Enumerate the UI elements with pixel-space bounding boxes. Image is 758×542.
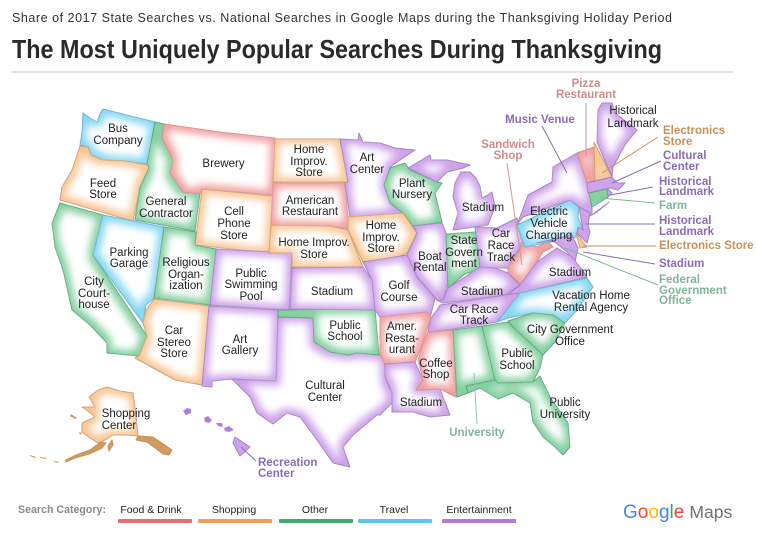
state: Hawaii small islands	[183, 408, 234, 432]
state: Mississippi	[416, 330, 456, 397]
label: Car Race Track TN: Car Race	[450, 304, 498, 316]
label: City Court-house: Court-	[78, 288, 110, 300]
label: Home Improv. Store ND: Store	[295, 167, 323, 179]
legend: Entertainment: Entertainment	[446, 504, 512, 516]
label: Plant Nursery: Plant	[399, 178, 426, 190]
callout: Cultural Center: Center	[663, 161, 700, 173]
callout: University: University	[449, 427, 505, 439]
label: Public Swimming Pool: Pool	[239, 291, 263, 303]
state: Oklahoma	[278, 309, 379, 355]
state: Hawaii	[233, 437, 250, 456]
label: Electric Vehicle Charging: Charging	[526, 230, 572, 242]
legend: Food & Drink	[118, 504, 192, 523]
label: Cultural Center TX: Center	[308, 392, 342, 404]
callout: Sandwich Shop: Sandwich	[481, 139, 535, 151]
state: California	[52, 203, 147, 356]
label: Golf Course: Course	[380, 292, 418, 304]
state: South Carolina	[508, 313, 565, 355]
line: University	[474, 373, 477, 424]
label: Stadium KS: Stadium	[311, 286, 353, 298]
state: Alaska islands	[30, 414, 82, 463]
label: Stadium MI: Stadium	[462, 202, 504, 214]
label: Car Stereo Store: Store	[160, 348, 188, 360]
label: Amer. Resta-urant: Amer.	[387, 321, 417, 333]
callout: Music Venue: Music Venue	[505, 114, 575, 126]
state: Utah	[154, 227, 216, 305]
line: Historical Landmark NJ	[586, 223, 655, 225]
subtitle: Share of 2017 State Searches vs. National Searches in Google Maps during the Thanksgiving Holiday Period	[12, 11, 672, 25]
label: Shopping Center: Center	[102, 420, 136, 432]
label: Plant Nursery: Nursery	[392, 189, 432, 201]
state: Rhode Island	[607, 188, 612, 197]
state: Virginia	[505, 248, 587, 297]
label: City Government Office: Office	[555, 336, 585, 348]
label: Historical Landmark Maine: Historical	[609, 105, 657, 117]
label: Stadium VA: Stadium	[549, 267, 591, 279]
label: American Restaurant: Restaurant	[282, 206, 339, 218]
label: Amer. Resta-urant: Resta-	[385, 333, 419, 345]
colored callout labels	[258, 78, 754, 480]
label: Feed Store: Store	[89, 189, 117, 201]
callout: Historical Landmark RI: Landmark	[659, 186, 715, 198]
state: Ohio	[475, 218, 524, 268]
label: Art Gallery: Gallery	[222, 345, 258, 357]
state: Maine	[597, 103, 637, 177]
callout: Federal Government Office: Office	[659, 295, 692, 307]
title: The Most Uniquely Popular Searches During Thanksgiving	[12, 34, 662, 64]
state: Kentucky	[437, 267, 520, 303]
label: Golf Course: Golf	[388, 280, 410, 292]
label: Home Improv. Store IA: Home	[366, 220, 396, 232]
label: Parking Garage: Parking	[110, 247, 148, 259]
callout: Historical Landmark NJ: Landmark	[659, 226, 715, 238]
state: Arkansas	[380, 312, 431, 364]
label: Cell Phone Store: Store	[220, 230, 248, 242]
label: Art Center: Art	[360, 152, 375, 164]
callout: Historical Landmark NJ: Historical	[659, 215, 711, 227]
label: Home Improv. Store ND: Improv.	[290, 156, 328, 168]
state: Texas	[232, 317, 392, 467]
label: Public Swimming Pool: Swimming	[224, 279, 278, 291]
Google Maps logo: Google Maps	[623, 502, 733, 523]
state: Michigan upper peninsula	[408, 155, 470, 182]
label: Public School OK: Public	[329, 320, 361, 332]
state: New Jersey	[577, 207, 590, 243]
label: Art Center: Center	[350, 164, 384, 176]
line: Stadium Maryland	[583, 252, 655, 264]
label: Car Stereo Store: Stereo	[157, 337, 191, 349]
line: Electronics Store north	[602, 137, 658, 173]
legend: Other: Other	[302, 504, 329, 516]
state: Maryland	[537, 235, 578, 262]
line: Cultural Center	[612, 161, 661, 183]
label: Religious Organ-ization: ization	[169, 280, 203, 292]
state: Oregon	[60, 146, 149, 221]
label: Home Improv. Store ND: Home	[294, 144, 324, 156]
state: Colorado	[210, 249, 292, 310]
legend title: Search Category:	[18, 504, 106, 516]
label: Brewery: Brewery	[202, 158, 245, 170]
callout: Recreation Center: Recreation	[258, 457, 317, 469]
label: Historical Landmark Maine: Landmark	[607, 118, 659, 130]
state: Long Island	[592, 202, 609, 215]
state: Idaho	[135, 122, 200, 231]
legend: Entertainment	[442, 504, 516, 523]
map of US states	[30, 103, 637, 467]
label: State Government: State	[451, 235, 477, 247]
state: South Dakota	[271, 183, 350, 229]
state: Washington	[80, 109, 155, 164]
legend: Food & Drink: Food & Drink	[120, 504, 182, 516]
label: City Court-house: house	[78, 299, 110, 311]
state: Alabama	[453, 326, 495, 397]
callout: Electronics Store north: Electronics	[663, 125, 725, 137]
state: Alaska peninsula and panhandle	[66, 436, 172, 462]
label: Home Improv. Store NE: Home Improv.	[278, 237, 350, 249]
label: Public School OK: School	[327, 331, 363, 343]
callout: Pizza Restaurant: Pizza	[572, 78, 601, 90]
label: Cell Phone Store: Phone	[217, 218, 251, 230]
label: General Contractor: Contractor	[139, 208, 193, 220]
label: Electric Vehicle Charging: Vehicle	[530, 218, 568, 230]
label: State Government: Govern	[445, 247, 483, 259]
label: Parking Garage: Garage	[110, 258, 148, 270]
label: Home Improv. Store IA: Improv.	[362, 232, 400, 244]
label: Bus Company: Company	[93, 135, 143, 147]
label: Coffee Shop: Coffee	[419, 358, 453, 370]
label: Vacation Home Rental Agency: Vacation Home	[552, 290, 630, 302]
callout: Cultural Center: Cultural	[663, 150, 706, 162]
label: State Government: ment	[451, 258, 478, 270]
state: Wisconsin	[384, 163, 442, 226]
callout: Federal Government Office: Federal	[659, 274, 700, 286]
state: Indiana	[446, 232, 480, 288]
state: Kansas	[290, 267, 375, 310]
state: Massachusetts	[587, 177, 625, 193]
state: Florida	[466, 376, 570, 455]
label: Art Gallery: Art	[233, 334, 248, 346]
label: Car Race Track OH: Car	[492, 228, 510, 240]
label: Cell Phone Store: Cell	[224, 206, 244, 218]
state: New Mexico	[202, 306, 278, 387]
callout: Stadium: Stadium	[659, 258, 704, 270]
label: Public School GA: Public	[501, 348, 533, 360]
label: Home Improv. Store NE: Store	[300, 249, 328, 261]
state: Connecticut	[589, 189, 608, 207]
legend: Travel	[358, 504, 432, 523]
label: Public University: Public	[549, 397, 581, 409]
label: Car Stereo Store: Car	[165, 325, 183, 337]
label: General Contractor: General	[146, 196, 186, 208]
label: Stadium KY: Stadium	[461, 286, 503, 298]
state: Delaware	[576, 233, 587, 248]
state: Iowa	[348, 213, 417, 262]
label: Shopping Center: Shopping	[102, 408, 150, 420]
label: Cultural Center TX: Cultural	[305, 380, 345, 392]
state: Tennessee	[428, 293, 520, 332]
callout: Sandwich Shop: Shop	[494, 150, 522, 162]
label: Car Race Track OH: Race	[488, 240, 514, 252]
label: Boat Rental: Rental	[413, 262, 447, 274]
state: Michigan lower peninsula	[453, 172, 495, 230]
state: Minnesota	[340, 133, 415, 217]
label: Religious Organ-ization: Organ-	[168, 269, 204, 281]
label: Home Improv. Store IA: Store	[367, 243, 395, 255]
state: New York	[517, 153, 592, 225]
state: West Virginia	[508, 242, 553, 284]
state labels	[78, 105, 659, 432]
callout leader lines	[241, 103, 661, 461]
label: Public School GA: School	[499, 360, 535, 372]
state: Louisiana	[385, 362, 450, 417]
label: Public University: University	[540, 409, 590, 421]
state: Pennsylvania	[517, 200, 583, 247]
state: Montana	[162, 124, 275, 195]
line: Music Venue	[542, 126, 567, 173]
label: Religious Organ-ization: Religious	[162, 257, 210, 269]
state: New Hampshire	[594, 142, 612, 181]
label: Stadium LA: Stadium	[400, 397, 442, 409]
label: Feed Store: Feed	[90, 178, 116, 190]
state: Nevada	[93, 215, 164, 323]
label: City Court-house: City	[84, 276, 104, 288]
label: Amer. Resta-urant: urant	[389, 344, 416, 356]
callout: Farm: Farm	[659, 200, 687, 212]
state: North Dakota	[273, 139, 348, 182]
state: Arizona	[135, 299, 209, 385]
legend	[18, 504, 516, 523]
state: Wyoming	[195, 189, 273, 253]
state: Missouri	[363, 255, 435, 318]
callout: Recreation Center: Center	[258, 468, 295, 480]
callout: Electronics Store north: Store	[663, 136, 692, 148]
callout: Federal Government Office: Government	[659, 285, 727, 297]
label: Vacation Home Rental Agency: Rental Agency	[554, 302, 628, 314]
callout: Electronics Store Delaware: Electronics Store	[659, 240, 754, 252]
legend: Other	[279, 504, 353, 523]
state: Nebraska	[269, 225, 363, 267]
label: Coffee Shop: Shop	[423, 369, 449, 381]
callout: Historical Landmark RI: Historical	[659, 176, 711, 188]
line: Farm	[600, 198, 655, 203]
legend: Travel: Travel	[380, 504, 408, 516]
line: Recreation Center	[241, 447, 256, 461]
label: American Restaurant: American	[286, 195, 334, 207]
state: North Carolina	[497, 278, 593, 323]
label: Electric Vehicle Charging: Electric	[530, 206, 568, 218]
callout: Pizza Restaurant: Restaurant	[556, 89, 616, 101]
state: Alaska	[82, 387, 138, 443]
line: Electronics Store Delaware	[583, 245, 656, 247]
line: Pizza Restaurant	[585, 103, 587, 157]
label: Public Swimming Pool: Public	[235, 268, 267, 280]
legend: Shopping	[198, 504, 272, 523]
state: Georgia	[482, 322, 543, 383]
label: Boat Rental: Boat	[418, 251, 443, 263]
state: Vermont	[577, 147, 595, 183]
line: Historical Landmark RI	[610, 187, 653, 195]
label: Bus Company: Bus	[108, 123, 128, 135]
label: City Government Office: City Government	[527, 324, 614, 336]
state: Illinois	[407, 223, 448, 300]
label: Car Race Track OH: Track	[487, 252, 515, 264]
legend: Shopping: Shopping	[212, 504, 256, 516]
line: Sandwich Shop	[507, 163, 522, 265]
line: Federal Government Office	[565, 248, 658, 285]
label: Car Race Track TN: Track	[460, 315, 488, 327]
